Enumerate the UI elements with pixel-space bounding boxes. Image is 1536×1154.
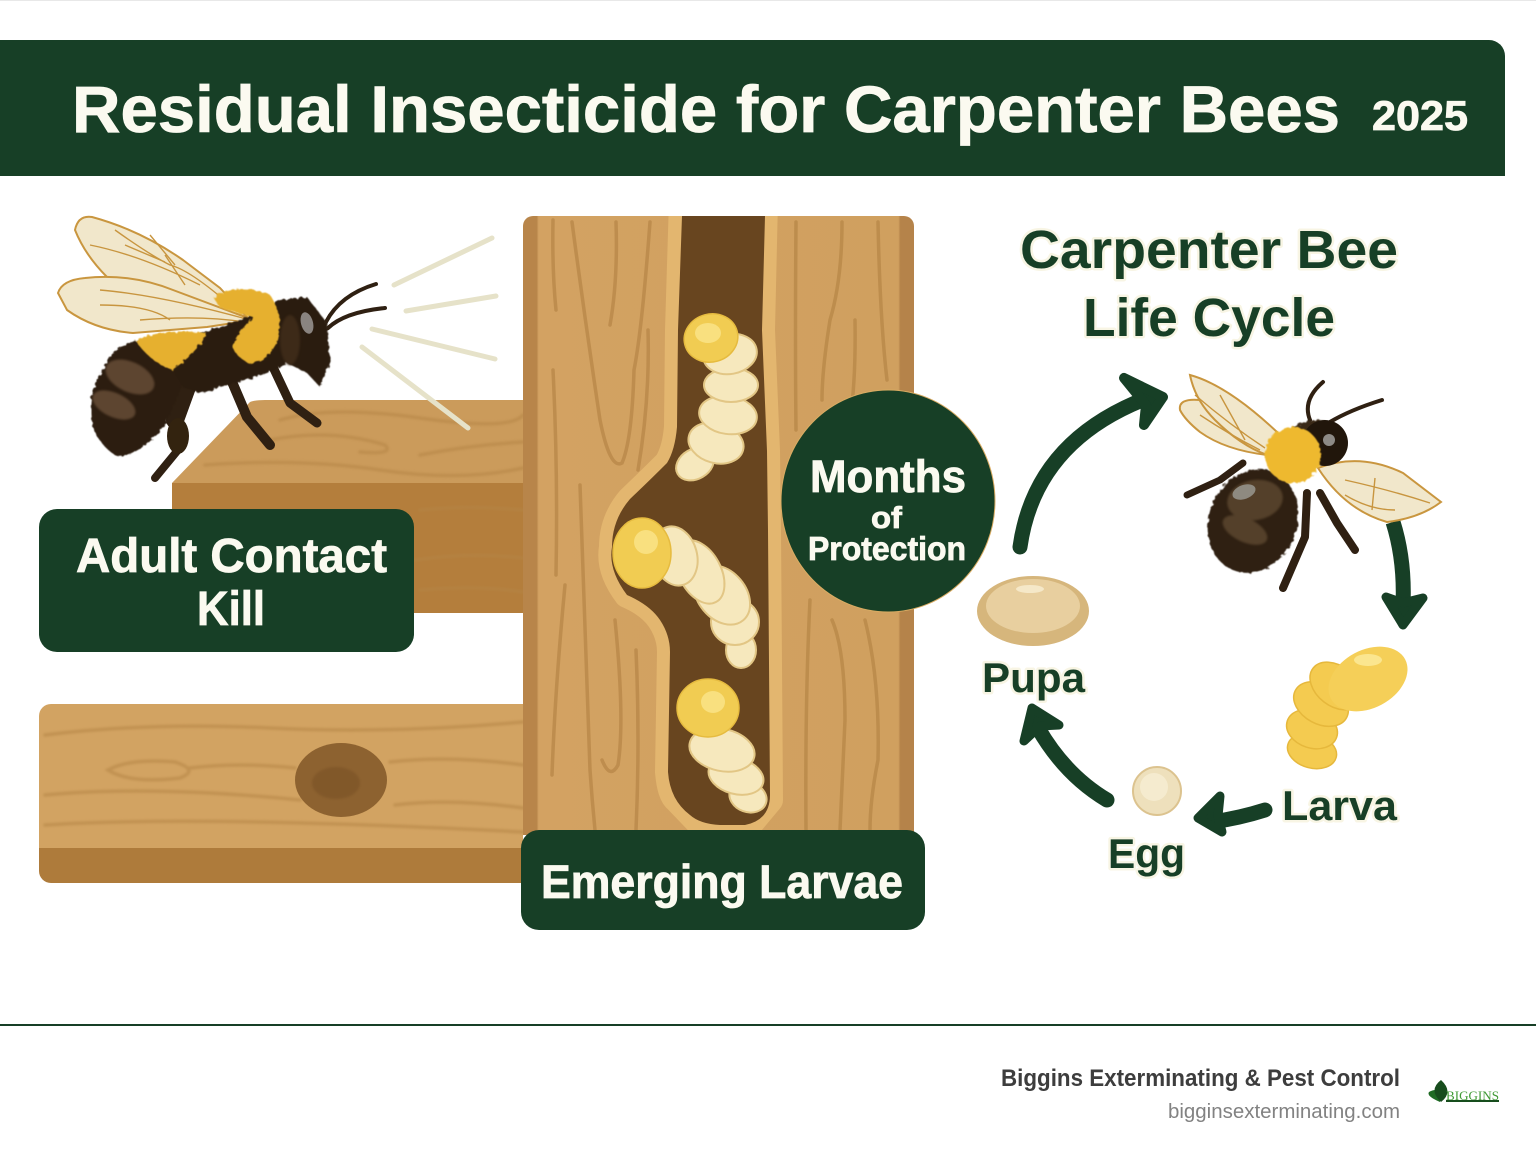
bore hole xyxy=(295,743,387,817)
panel: wood cross-section with tunnel xyxy=(523,200,914,835)
hind leg joint xyxy=(167,418,189,454)
logo: BIGGINS xyxy=(1446,1088,1499,1103)
abdomen band xyxy=(1218,475,1286,551)
illustration: side-view carpenter bee xyxy=(58,217,385,478)
logo xyxy=(1428,1080,1499,1103)
legs xyxy=(1187,382,1382,588)
yellow abdomen fur xyxy=(135,332,207,370)
abdomen xyxy=(1192,455,1314,587)
arrow: adult to larva xyxy=(1386,522,1423,625)
heading: carpenter bee life cycle: Life Cycle xyxy=(1083,288,1335,348)
illustration: top-view adult bee xyxy=(1180,375,1441,588)
tunnel interior xyxy=(611,216,770,825)
larva: middle xyxy=(613,518,762,668)
icon: egg stage xyxy=(1133,767,1181,815)
title banner xyxy=(0,40,1505,176)
badge: months of protection: of xyxy=(871,500,903,535)
larva: bottom xyxy=(677,679,771,818)
label: emerging larvae: Emerging Larvae xyxy=(541,855,903,908)
thorax xyxy=(1265,427,1321,483)
company name: Biggins Exterminating & Pest Control xyxy=(1001,1065,1400,1092)
legs xyxy=(155,367,317,478)
abdomen and thorax xyxy=(91,297,330,456)
label: adult contact kill xyxy=(39,509,414,652)
lower wood plank with entry hole xyxy=(39,704,523,883)
badge: months of protection: Protection xyxy=(808,530,966,567)
yellow thorax fur xyxy=(213,289,280,364)
title: Residual Insecticide for Carpenter Bees xyxy=(72,72,1340,146)
wings xyxy=(1180,375,1441,522)
abdomen sheen xyxy=(1230,481,1258,503)
label: adult contact kill: Kill xyxy=(197,583,265,636)
icon: larva stage xyxy=(1281,634,1419,774)
antennae xyxy=(326,284,385,328)
arrow: larva to egg xyxy=(1198,796,1265,832)
head xyxy=(1290,420,1348,466)
upper wood plank xyxy=(172,400,523,613)
year: 2025 xyxy=(1372,92,1468,139)
icon: contact lines xyxy=(362,238,496,428)
eye xyxy=(298,311,316,335)
tunnel rim xyxy=(611,200,770,824)
label: emerging larvae xyxy=(521,830,925,930)
heading: carpenter bee life cycle xyxy=(1020,220,1398,348)
arrow: egg to pupa xyxy=(1024,708,1107,800)
label: adult contact kill: Adult Contact xyxy=(76,530,387,583)
heading: carpenter bee life cycle: Carpenter Bee xyxy=(1020,220,1398,280)
arrow: pupa to adult xyxy=(1020,378,1163,547)
wings xyxy=(58,217,253,333)
icon: pupa stage xyxy=(977,576,1089,646)
abdomen bands xyxy=(88,315,300,426)
label: pupa: Pupa xyxy=(982,654,1086,701)
website: bigginsexterminating.com xyxy=(1168,1101,1400,1123)
label: larva: Larva xyxy=(1282,782,1398,829)
larva: top xyxy=(670,308,760,487)
badge: months of protection xyxy=(781,390,995,612)
badge: months of protection: Months xyxy=(810,451,966,502)
footer xyxy=(0,1024,1536,1123)
label: egg: Egg xyxy=(1108,830,1185,877)
